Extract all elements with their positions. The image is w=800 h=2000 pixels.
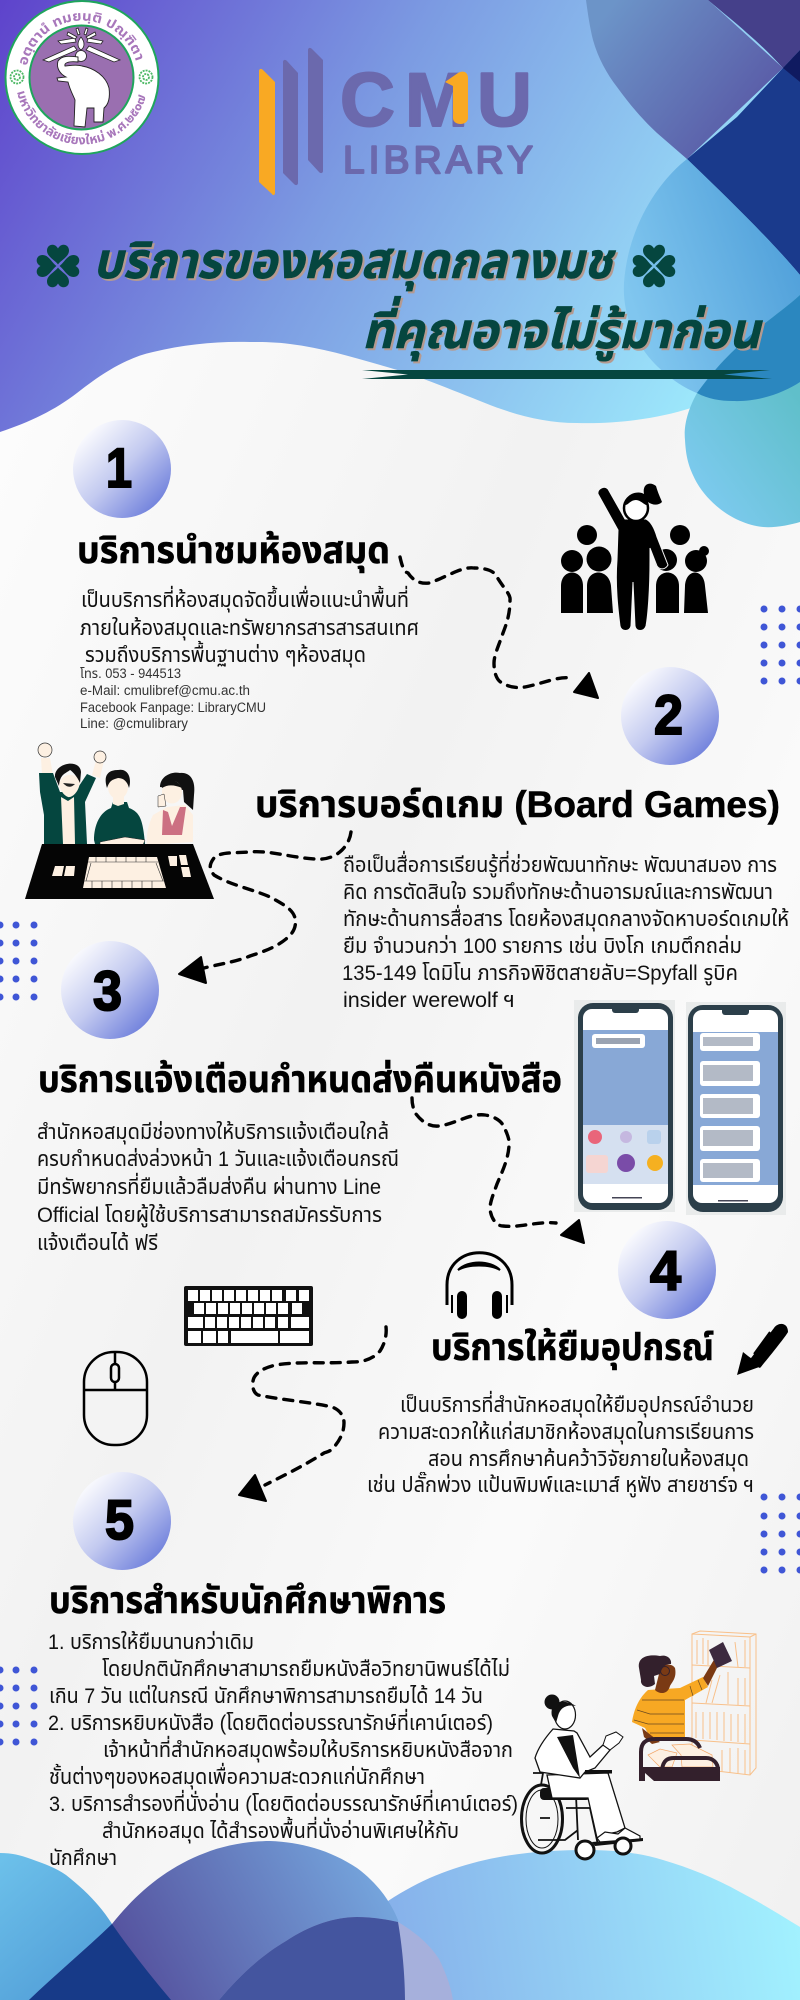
step 5 number: 5 [105,1488,134,1551]
illustration: people playing board game [25,743,214,899]
icon: computer mouse [84,1352,147,1445]
title underline [362,370,772,379]
student top [557,1735,580,1778]
step 5 description: เจ้าหน้าที่สำนักหอสมุดพร้อมให้บริการหยิบหนังสือจาก [103,1735,513,1763]
children [561,525,709,613]
player middle [94,770,145,849]
step 5 description: 2. บริการหยิบหนังสือ (โดยติดต่อบรรณารักษ์ที่เคาน์เตอร์) [48,1708,493,1735]
seal motto: อตฺตานํ ทมยนฺติ ปณฺฑิตา [20,12,142,65]
step 3 description: Official โดยผู้ใช้บริการสามารถสมัครรับการ [37,1203,382,1228]
step 2 description [342,850,789,1012]
step 5 description: โดยปกตินักศึกษาสามารถยืมหนังสือวิทยานิพนธ์ได้ไม่ [102,1657,510,1681]
student trousers [547,1773,625,1838]
wheelchair seat [540,1788,590,1800]
step 2 number: 2 [654,683,683,746]
dots right lower [760,1494,800,1574]
arrow: step 2 to step 3 [179,832,351,983]
step 1 contact details [80,666,266,731]
logo wordmark LIBRARY: LIBRARY [343,139,533,182]
teacher body [598,487,668,630]
seal rosettes [10,70,152,84]
step 3 description: แจ้งเตือนได้ ฟรี [37,1231,158,1255]
step 5 description [48,1630,518,1870]
CMU Library logo [259,48,533,195]
waving hand [603,1732,623,1750]
footrest [592,1838,643,1846]
step 5 description: เกิน 7 วัน แต่ในกรณี นักศึกษาพิการสามารถยืมได้ 14 วัน [49,1684,483,1708]
step 2 description: insider werewolf ฯ [343,989,515,1012]
step 4 number [618,1221,716,1319]
step 5 description: ชั้นต่างๆของหอสมุดเพื่อความสะดวกแก่นักศึกษา [49,1762,425,1790]
icon: pen [737,1324,788,1375]
phone screenshot: LINE chat reminders [686,1002,786,1215]
step 4 description: ความสะดวกให้แก่สมาชิกห้องสมุดในการเรียนการ [378,1420,754,1445]
top gradient wave banner [0,0,800,432]
arrow: step 1 to step 2 [400,557,598,698]
step 3 description: ครบกำหนดส่งล่วงหน้า 1 วันและแจ้งเตือนกรณี [37,1147,399,1171]
cart base [639,1767,720,1781]
step 3 number [61,941,159,1039]
step 1 number: 1 [106,436,132,499]
step 1 contact details: Line: @cmulibrary [80,716,188,731]
arrow: step 4 to step 5 [239,1327,386,1501]
step 4 description: เป็นบริการที่สำนักหอสมุดให้ยืมอุปกรณ์อำนวย [400,1390,754,1418]
title [37,233,772,379]
step 4 heading: บริการให้ยืมอุปกรณ์ [431,1327,714,1370]
step 2 description: ทักษะด้านการสื่อสาร โดยห้องสมุดกลางจัดหาบอร์ดเกมให้ [343,904,789,932]
book cart [641,1739,718,1780]
student feet [597,1828,640,1842]
step 4 number: 4 [650,1239,681,1302]
bottom wave shapes [0,1841,800,2000]
step 3 heading: บริการแจ้งเตือนกำหนดส่งคืนหนังสือ [38,1059,562,1100]
player left [38,743,106,844]
wheels front [576,1838,631,1859]
icon: keyboard [184,1286,313,1346]
reader arm and face [642,1658,720,1744]
step 5 heading: บริการสำหรับนักศึกษาพิการ [49,1580,446,1621]
held book [709,1642,732,1668]
arrow: step 3 to step 4 [412,1098,584,1243]
reader hair [639,1655,671,1687]
step 1 number [73,420,171,518]
dots left lower [0,1666,38,1746]
icon: teacher and children [561,484,709,630]
board tile grid [84,857,164,888]
step 2 description: ยืม จำนวนกว่า 100 รายการ เช่น บิงโก เกมตึกถล่ม [343,934,742,958]
step 4 description [367,1390,754,1498]
armrest [585,1770,612,1774]
step 5 description: 3. บริการสำรองที่นั่งอ่าน (โดยติดต่อบรรณารักษ์ที่เคาน์เตอร์) [49,1789,518,1816]
student coat [535,1729,610,1778]
reader glasses [660,1666,670,1676]
step 1 contact details: Facebook Fanpage: LibraryCMU [80,700,266,715]
dots top right [760,606,800,684]
game board [83,857,166,888]
student hair bun [544,1694,560,1710]
seal crown rays [43,28,120,62]
step 2 description: ถือเป็นสื่อการเรียนรู้ที่ช่วยพัฒนาทักษะ พัฒนาสมอง การ [343,850,777,878]
seal university name: มหาวิทยาลัยเชียงใหม่ พ.ศ.๒๕๐๗ [17,91,146,144]
logo orange accent [445,72,468,124]
student hair [552,1702,576,1723]
step 3 description: สำนักหอสมุดมีช่องทางให้บริการแจ้งเตือนใกล้ [37,1120,389,1145]
icon: headphones [447,1253,512,1319]
step 3 description: มีทรัพยากรที่ยืมแล้วลืมส่งคืน ผ่านทาง Line [37,1172,381,1199]
teacher head [624,495,648,521]
teacher hair [624,484,662,505]
wheelchair frame [533,1773,598,1845]
step 1 description: เป็นบริการที่ห้องสมุดจัดขึ้นเพื่อแนะนำพื้นที่ [81,585,409,613]
step 2 heading: บริการบอร์ดเกม (Board Games) [255,784,780,825]
seal inner purple disc [30,26,134,130]
step 5 description: นักศึกษา [49,1847,117,1870]
step 5 description: 1. บริการให้ยืมนานกว่าเดิม [48,1630,254,1654]
clover right [633,245,675,287]
student neck and head [554,1701,576,1729]
reader sweater [632,1677,708,1737]
step 1 heading: บริการนำชมห้องสมุด [77,530,390,573]
big wheel [522,1785,562,1853]
title line 2: ที่คุณอาจไม่รู้มาก่อน [362,296,764,362]
logo wordmark CMU: CMU [340,58,532,143]
game table [25,844,214,899]
step 3 description [37,1120,399,1255]
clover left [37,245,79,287]
player right [147,773,194,845]
step 4 description: สอน การศึกษาค้นคว้าวิจัยภายในห้องสมุด [428,1447,749,1472]
stacked books [648,1744,713,1767]
logo bars [259,69,275,195]
step 4 description: เช่น ปลั๊กพ่วง แป้นพิมพ์และเมาส์ หูฟัง สายชาร์จ ฯ [367,1471,754,1498]
step 1 description: รวมถึงบริการพื้นฐานต่าง ๆห้องสมุด [85,640,366,668]
phone screenshot: LINE rich menu [574,1000,675,1212]
step 5 description: สำนักหอสมุด ได้สำรองพื้นที่นั่งอ่านพิเศษให้กับ [102,1816,459,1844]
corner shapes top right [586,0,800,527]
illustration: student in wheelchair [522,1694,643,1859]
step 1 contact details: e-Mail: cmulibref@cmu.ac.th [80,683,250,698]
illustration: bookshelf and reader [632,1631,756,1781]
step 5 number [73,1472,171,1570]
dots left middle [0,922,38,1000]
game cards [52,855,191,877]
step 2 description: 135-149 โดมิโน ภารกิจพิชิตสายลับ=Spyfall รูบิค [342,962,738,986]
sweater stripes [634,1680,702,1733]
bookshelf [692,1631,756,1775]
title line 1: บริการของหอสมุดกลางมช [93,233,617,292]
step 1 description [80,585,419,668]
step 2 description: คิด การตัดสินใจ รวมถึงทักษะด้านอารมณ์และการพัฒนา [343,880,773,904]
seal elephant [57,56,109,127]
step 3 number: 3 [93,959,122,1022]
university seal [4,0,160,155]
step 2 number [621,667,719,765]
step 1 contact details: โทร. 053 - 944513 [80,666,181,681]
step 1 description: ภายในห้องสมุดและทรัพยากรสารสารสนเทศ [80,616,419,641]
